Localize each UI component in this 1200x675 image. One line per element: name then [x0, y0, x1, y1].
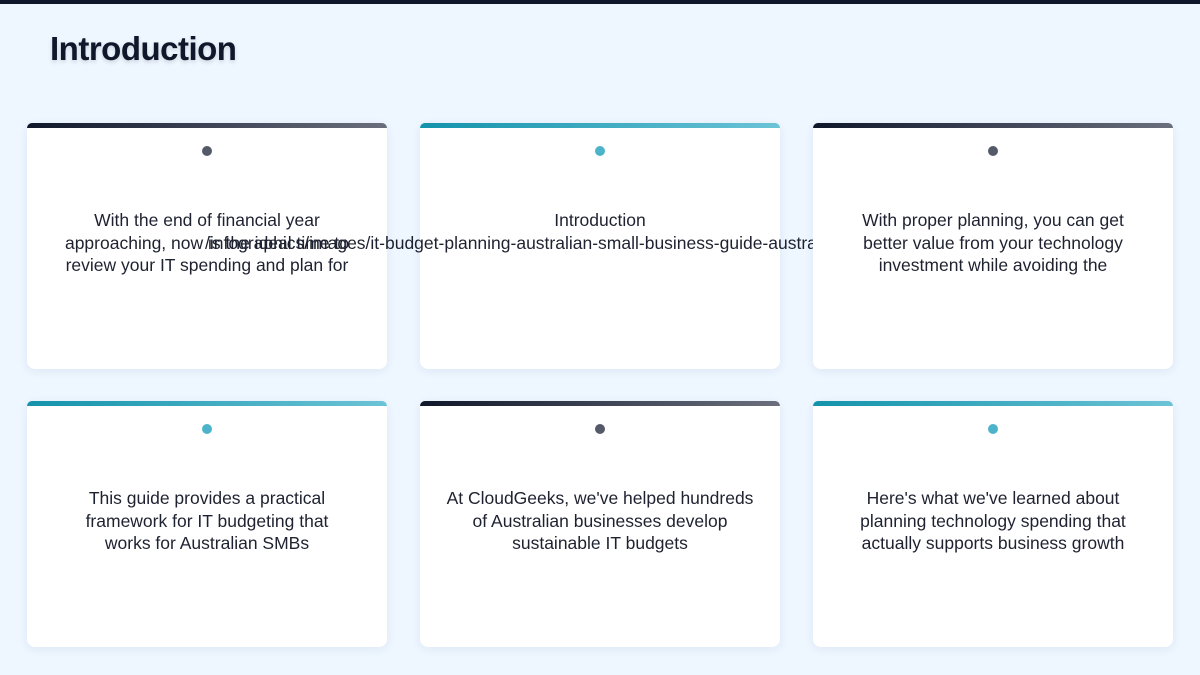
card 4 — [27, 401, 387, 647]
card 3 — [813, 123, 1173, 369]
card 2 text — [205, 210, 995, 252]
card 5 text: At CloudGeeks, we've helped hundreds of Australian businesses develop sustainable IT budgets — [447, 488, 753, 553]
card 6 — [813, 401, 1173, 647]
card 6 text: Here's what we've learned about planning technology spending that actually supports business growth — [860, 488, 1126, 553]
card 4 text: This guide provides a practical framework for IT budgeting that works for Australian SMBs — [86, 488, 328, 553]
card 5 — [420, 401, 780, 647]
card 2 text: Introduction — [554, 210, 646, 230]
title: Introduction — [50, 30, 236, 67]
card 2 — [420, 123, 780, 369]
card 1 — [27, 123, 387, 369]
card 2 text: /infographics/images/it-budget-planning-australian-small-business-guide-australia-2025-edition-v2.png — [205, 232, 995, 252]
